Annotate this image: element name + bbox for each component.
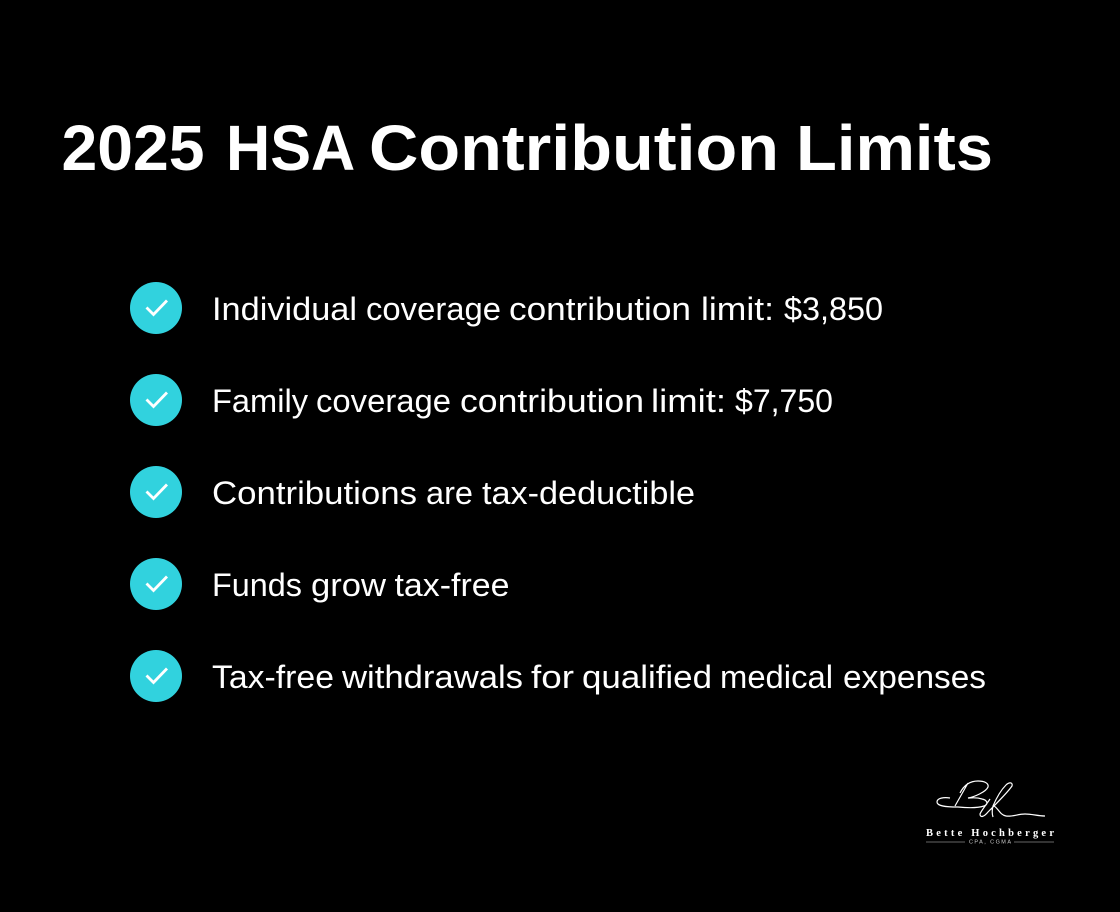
text: withdrawals: expenses: [843, 659, 986, 695]
rule right: [1014, 842, 1054, 843]
text: tax-deductible: tax-deductible: [482, 475, 695, 511]
text: individual limit: contribution: [509, 291, 691, 327]
title: 2025: [62, 112, 204, 184]
icon: check circle: [130, 466, 182, 518]
text: withdrawals: medical: [720, 659, 833, 695]
text: withdrawals: withdrawals: [341, 659, 523, 695]
title: Contribution: [369, 112, 779, 184]
list item: individual limit: [130, 282, 883, 334]
text: individual limit: limit:: [701, 291, 774, 327]
text: withdrawals: qualified: [582, 659, 712, 695]
rule left: [926, 842, 965, 843]
list item: withdrawals: [130, 650, 986, 702]
icon: check circle: [130, 650, 182, 702]
text: tax-deductible: are: [426, 475, 473, 511]
icon: check circle: [130, 374, 182, 426]
text: individual limit: coverage: [366, 291, 501, 327]
signature: BH: [937, 781, 1045, 817]
name: Bette Hochberger: [926, 828, 1054, 839]
checklist: [130, 282, 986, 702]
icon: check circle: [130, 282, 182, 334]
text: tax-free growth: tax-free: [394, 567, 510, 603]
text: family limit: Family: [212, 383, 308, 419]
text: family limit: $7,750: [735, 383, 833, 419]
text: tax-deductible: Contributions: [212, 475, 417, 511]
icon: check circle: [130, 558, 182, 610]
logo: Bette Hochberger: [926, 781, 1054, 846]
text: withdrawals: for: [531, 659, 574, 695]
credentials: CPA, CGMA: [969, 840, 1011, 846]
title: HSA: [226, 112, 354, 184]
text: family limit: limit:: [651, 383, 726, 419]
text: tax-free growth: grow: [311, 567, 387, 603]
text: family limit: contribution: [460, 383, 644, 419]
title: Limits: [796, 112, 993, 184]
text: family limit: coverage: [316, 383, 451, 419]
list item: tax-free growth: [130, 558, 510, 610]
text: withdrawals: Tax-free: [212, 659, 334, 695]
text: individual limit: $3,850: [784, 291, 883, 327]
text: tax-free growth: Funds: [212, 567, 302, 603]
list item: family limit: [130, 374, 833, 426]
text: individual limit: Individual: [212, 291, 357, 327]
list item: tax-deductible: [130, 466, 695, 518]
